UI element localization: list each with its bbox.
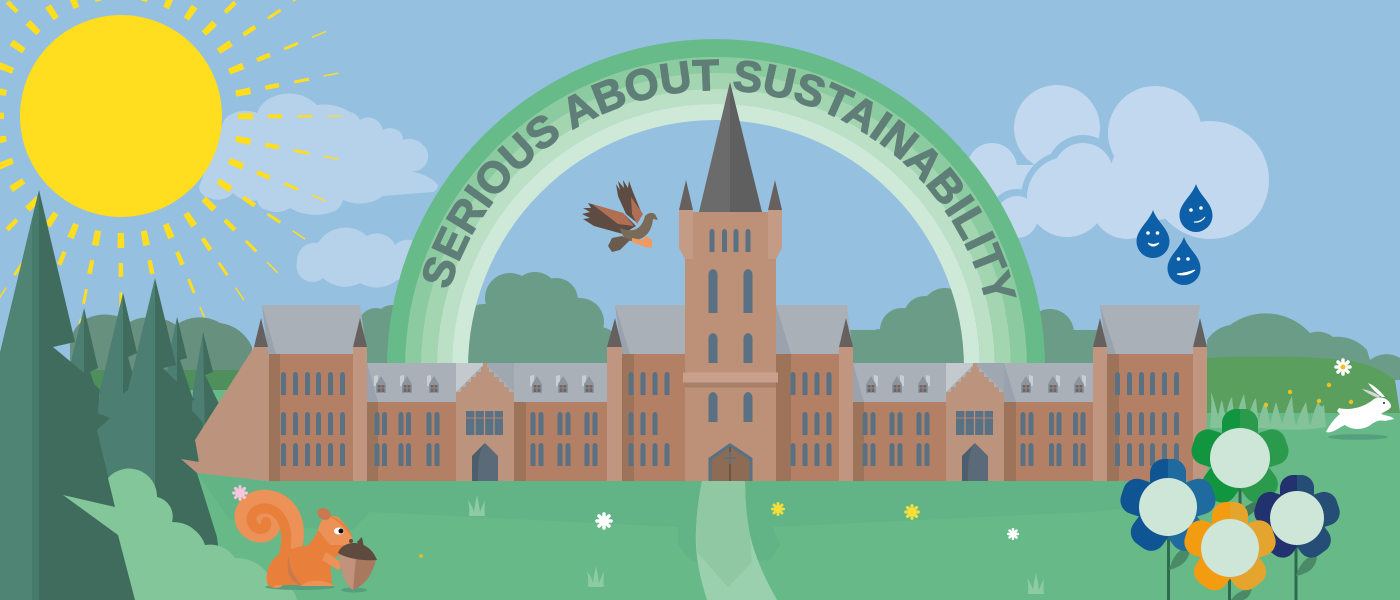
rainbow arch [396,48,1036,368]
tree: middle conifer [97,278,225,600]
central tower [679,82,782,481]
ground grass tufts [468,495,1044,594]
squirrel [244,500,353,590]
lower roofs [367,363,1093,402]
hedge: left [90,370,240,395]
sun rays [0,0,335,330]
daisy: meadow [1336,360,1350,374]
tower door [708,443,752,481]
cloud: right large [967,85,1269,245]
ground shadow [197,473,1207,562]
windows: mirrored wings [790,372,1179,466]
windows: wings [281,372,670,466]
heading on arch: SERIOUS ABOUT SUSTAINABILITY [422,59,1017,298]
ground flowers [234,487,1018,558]
acorn [338,540,377,592]
rabbit [1326,383,1394,440]
roofs of towers [262,305,1200,354]
spire [679,82,782,212]
sun [20,15,222,217]
meadow yellow flowers [1264,383,1353,407]
path [696,481,777,600]
pilasters [353,347,1207,481]
bush [63,469,297,600]
cloud: left large [199,93,438,215]
flower: blue [1117,459,1219,600]
drop 3 [1168,237,1200,285]
hawk [582,180,658,252]
drop 1 [1136,210,1170,258]
ground [0,390,1400,600]
left wing [181,347,269,481]
hedge: right [1207,356,1400,413]
building [181,82,1207,481]
background hills: right [1207,313,1400,380]
flower: orange [1181,502,1279,600]
brick bodies [269,354,1193,481]
background trees: behind arch [358,272,1100,370]
cloud: left small [297,228,412,288]
grass tufts: meadow [1210,392,1326,430]
drops with faces [1136,184,1212,285]
shaded strips [269,354,1119,481]
flower: green [1188,409,1292,525]
trees: small background conifers [60,293,222,440]
drop 2 [1180,184,1212,232]
gable: right [946,363,1004,481]
gable: left [456,363,514,481]
background hills: left [70,315,252,400]
tree: large foreground conifer [0,190,135,600]
flower: navy [1251,475,1343,600]
turret cones [254,318,1207,347]
tower windows [708,229,752,422]
